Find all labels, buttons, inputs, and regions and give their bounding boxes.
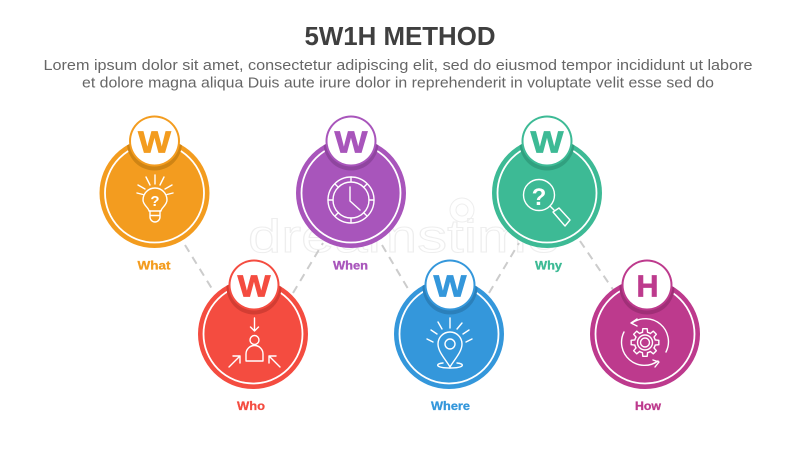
watermark: dreamstime <box>248 210 560 262</box>
badge letter: W: W <box>138 124 172 160</box>
connector: who to when <box>293 243 323 293</box>
badge letter: W: W <box>434 268 467 304</box>
title: 5W1H METHOD <box>304 21 496 51</box>
icon: magnifier with question mark: ? <box>532 184 546 211</box>
label: Why: Why <box>535 258 562 272</box>
connector: why to how <box>580 241 614 291</box>
badge letter: W: W <box>238 268 271 304</box>
label: Who: Who <box>237 399 265 413</box>
icon: clock <box>328 177 374 223</box>
connector: when to where <box>382 245 410 292</box>
icon: location pin <box>427 318 472 368</box>
icon: light bulb with question mark <box>137 175 173 222</box>
icon: person with arrows <box>229 318 280 367</box>
node: how <box>590 260 700 413</box>
subtitle text <box>44 57 752 92</box>
label: When: When <box>333 258 368 272</box>
label: How: How <box>635 399 662 413</box>
icon: magnifier with question mark <box>524 180 570 226</box>
node: when <box>296 116 406 272</box>
connector: what to who <box>185 245 214 292</box>
node: why <box>492 116 602 272</box>
icon: light bulb with question mark: ? <box>150 193 160 210</box>
badge letter: W: W <box>334 124 368 160</box>
badge letter: H: H <box>636 268 658 304</box>
node: what <box>100 116 210 272</box>
subtitle text: et dolore magna aliqua Duis aute irure dolor in reprehenderit in voluptate velit esse sed do <box>82 74 714 92</box>
subtitle text: Lorem ipsum dolor sit amet, consectetur adipiscing elit, sed do eiusmod tempor incididunt ut labore <box>44 57 752 74</box>
node: who <box>198 260 308 413</box>
node: where <box>394 260 504 413</box>
watermark <box>248 198 560 262</box>
icon: gear with cycle arrows <box>622 319 668 367</box>
label: What: What <box>138 258 171 272</box>
connector: where to why <box>489 243 519 293</box>
badge letter: W: W <box>530 124 564 160</box>
label: Where: Where <box>431 399 470 413</box>
